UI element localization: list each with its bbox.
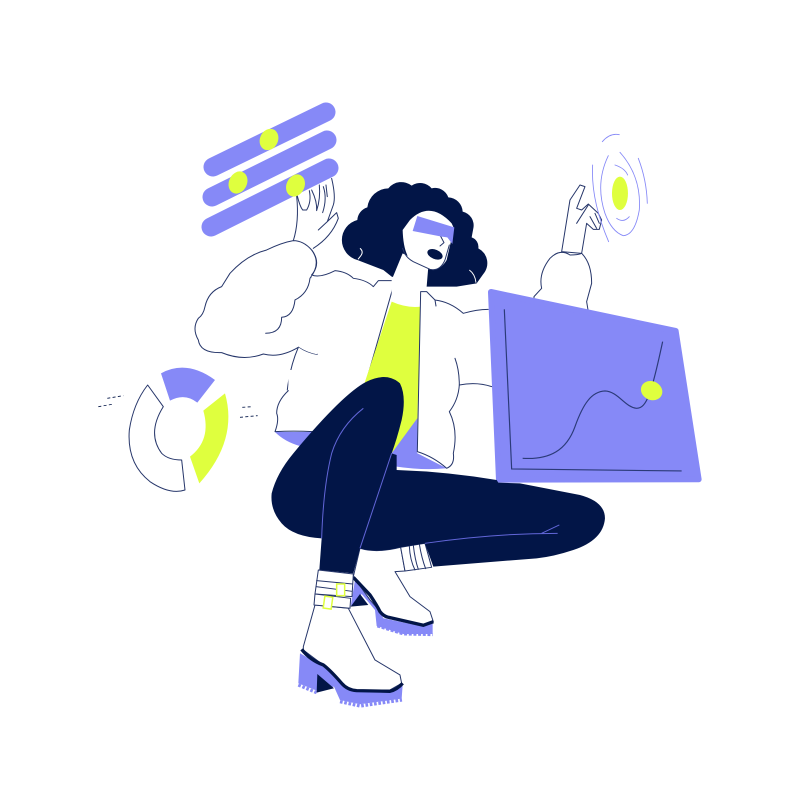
purple jacket lining, right (392, 418, 447, 469)
face (403, 211, 454, 269)
chart axes (504, 309, 682, 471)
purple jacket lining, left (275, 432, 315, 446)
jacket hem, left (275, 370, 367, 432)
left hand (293, 173, 338, 248)
donut chart (98, 368, 258, 491)
front boot sole (298, 653, 403, 704)
legs and boots (271, 377, 605, 706)
ankle straps (315, 570, 353, 597)
puffy left sleeve (195, 241, 323, 357)
sock (401, 543, 432, 571)
heel (317, 674, 334, 693)
left arm, sleeve and hand (195, 173, 338, 357)
mouth (426, 247, 444, 262)
buckles (337, 584, 345, 596)
navy leggings (271, 377, 605, 573)
torso: neck, shirt, jacket, face (363, 211, 493, 469)
right arm, sleeve and hand (534, 185, 602, 312)
icon: floating slider bars (211, 112, 329, 227)
right jacket body (417, 292, 493, 468)
lime shirt (363, 302, 421, 453)
chart marker (638, 378, 666, 404)
back boot (353, 547, 433, 625)
hair (342, 182, 487, 287)
icon: target with radiating rings (592, 134, 647, 242)
neck (392, 253, 428, 308)
front boot (303, 605, 402, 690)
right sleeve (534, 252, 592, 312)
right hand (562, 185, 602, 253)
VR visor (413, 216, 454, 244)
jacket torso, left side (278, 271, 395, 483)
chart curve (523, 342, 663, 458)
chart panel (491, 292, 699, 480)
back boot sole (351, 580, 433, 634)
